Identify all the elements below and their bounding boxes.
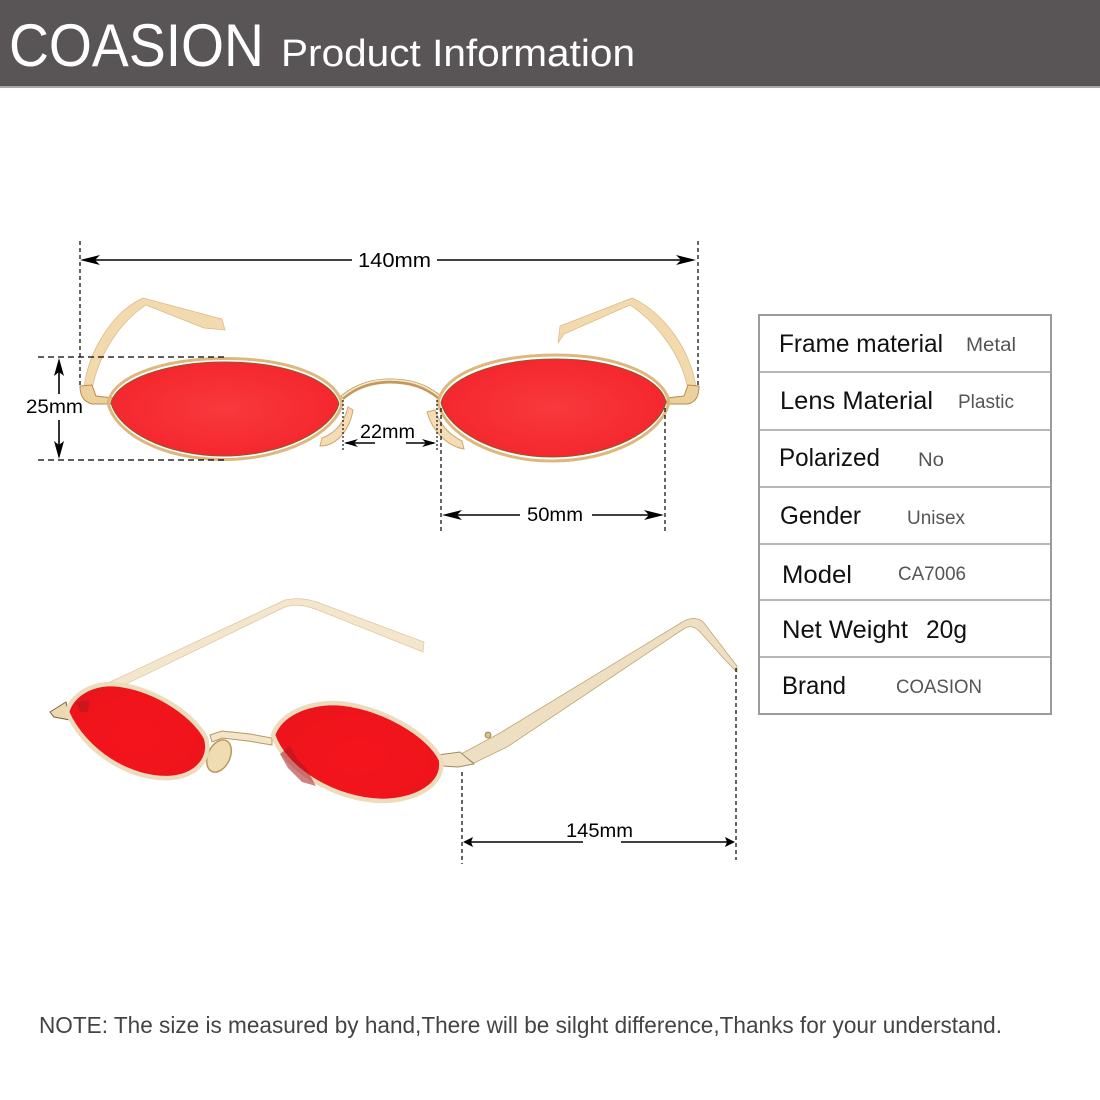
- row: frame material: Metal: [966, 335, 1016, 356]
- right temple: [558, 298, 696, 390]
- product specification table: [759, 315, 1051, 714]
- nose pad: [202, 736, 236, 776]
- dimension: 25mm lens height: 25mm: [26, 397, 83, 418]
- row: polarized: [779, 444, 944, 472]
- left end piece: [50, 702, 70, 720]
- row: frame material: Frame material: [779, 330, 943, 358]
- near temple: [461, 619, 737, 763]
- dimension: 22mm bridge width: [343, 400, 437, 452]
- left hinge: [80, 385, 113, 404]
- bridge: [342, 381, 440, 398]
- footnote: NOTE: The size is measured by hand,There will be silght difference,Thanks for your understand.: [39, 1012, 1002, 1038]
- row: brand: [782, 672, 982, 700]
- row: polarized: No: [918, 450, 944, 471]
- hinge screw: [485, 732, 491, 738]
- row: gender: Unisex: [907, 508, 965, 529]
- right nose pad: [427, 410, 464, 449]
- dimension: 140mm overall width: 140mm: [358, 250, 431, 272]
- front view sunglasses: [80, 298, 699, 461]
- row: net weight: 20g: [926, 616, 967, 644]
- dimension: 145mm temple length: 145mm: [566, 821, 633, 842]
- bridge: [210, 731, 272, 745]
- row: polarized: Polarized: [779, 444, 880, 472]
- brand title: COASION: [9, 12, 264, 79]
- row: brand: Brand: [782, 672, 846, 700]
- subtitle: Product Information: [281, 33, 635, 75]
- dimension: 25mm lens height: [26, 357, 228, 460]
- right lens: [441, 359, 666, 457]
- row: gender: Gender: [780, 502, 861, 530]
- row: gender: [780, 502, 965, 530]
- three-quarter view sunglasses: [50, 599, 737, 801]
- left lens: [67, 684, 207, 778]
- row: lens material: Plastic: [958, 392, 1014, 413]
- dimension: 140mm overall width: [80, 241, 698, 388]
- dimension: 50mm lens width: 50mm: [527, 505, 583, 526]
- row: lens material: [780, 387, 1014, 415]
- row: net weight: [782, 616, 967, 644]
- row: model: Model: [782, 561, 852, 589]
- dimension: 50mm lens width: [441, 408, 665, 534]
- dimension: 145mm temple length: [462, 668, 736, 864]
- row: lens material: Lens Material: [780, 387, 933, 415]
- left frame: [108, 358, 342, 460]
- header bar: [0, 0, 1100, 88]
- right hinge: [667, 385, 699, 404]
- row: model: [782, 561, 966, 589]
- row: model: CA7006: [898, 564, 966, 585]
- row: brand: COASION: [896, 677, 982, 698]
- right frame: [438, 355, 669, 461]
- left lens: [111, 362, 339, 456]
- left nose pad: [320, 407, 353, 446]
- row: net weight: Net Weight: [782, 616, 908, 644]
- lens reflection small: [76, 700, 90, 712]
- right lens: [273, 703, 441, 801]
- dimension: 22mm bridge width: 22mm: [360, 422, 415, 443]
- lens reflection: [280, 746, 316, 786]
- hinge detail: [438, 752, 474, 767]
- left temple: [84, 298, 225, 390]
- far temple: [108, 599, 424, 688]
